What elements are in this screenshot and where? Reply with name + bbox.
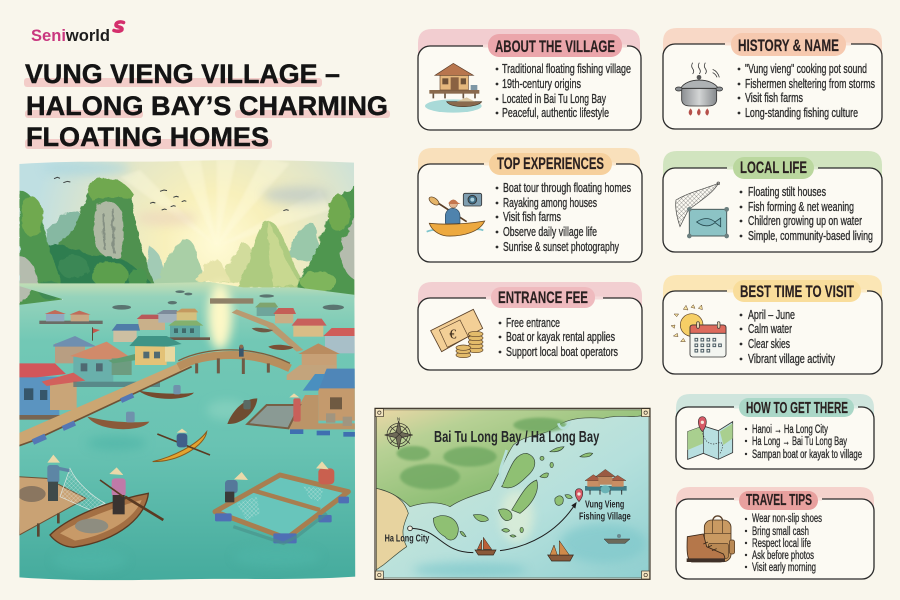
bullet list: Visit early morning (752, 562, 816, 574)
bullet list: Observe daily village life (503, 225, 597, 239)
junk boats (475, 537, 573, 561)
band (676, 487, 874, 512)
title (24, 59, 390, 152)
middle houses (92, 309, 210, 342)
bullet list: Respect local life (752, 538, 811, 550)
bullet list: Visit fish farms (503, 210, 561, 224)
sky (20, 160, 354, 288)
bullet list: Support local boat operators (506, 345, 618, 359)
icon: sun and calendar (671, 305, 726, 357)
bullet list: Clear skies (748, 337, 790, 351)
title: HALONG BAY’S CHARMING (26, 91, 388, 121)
mainland (376, 409, 649, 507)
main left karst (48, 176, 154, 284)
logo: Seniworld: Seniworld (31, 26, 110, 45)
illustration: floating village scene (10, 150, 363, 590)
bullet list: Visit fish farms (745, 91, 803, 105)
bullet list: Free entrance (506, 316, 560, 330)
bullet list: 19th-century origins (502, 77, 581, 91)
green forest (397, 418, 567, 489)
title highlights (24, 78, 390, 149)
right houses near (287, 343, 357, 437)
bullet list (738, 62, 875, 120)
bullet list (745, 424, 862, 461)
bullet list (496, 181, 631, 254)
yellow kayak and paddler (153, 429, 210, 462)
heading: ENTRANCE FEE (498, 288, 588, 307)
bullet list: Wear non-slip shoes (752, 513, 822, 525)
panel: top experiences (418, 148, 642, 262)
icon: ticket and coins: € (449, 327, 456, 342)
heading (491, 287, 595, 308)
water inlets (500, 422, 570, 485)
distant left houses (39, 310, 103, 324)
right floating cage (247, 393, 301, 428)
band (418, 282, 642, 312)
band (676, 394, 874, 420)
band (418, 148, 640, 178)
birds (54, 177, 289, 211)
heading (488, 34, 622, 57)
band (418, 29, 640, 60)
fish cage with workers (215, 461, 349, 543)
map (375, 408, 650, 579)
heading (739, 398, 854, 417)
map sea (376, 409, 649, 578)
icon: floating houses (585, 469, 627, 495)
map sea shading (413, 490, 647, 578)
bullet list: Sunrise & sunset photography (503, 240, 620, 254)
heading (733, 280, 861, 302)
icon: cooking pot (675, 63, 723, 116)
label: Ha Long City: Ha Long City (385, 534, 430, 545)
label: Vung Vieng Fishing Village (579, 499, 631, 522)
bullet list (740, 185, 873, 243)
left houses near (17, 336, 182, 420)
frame (375, 408, 650, 579)
panel: about the village (418, 29, 641, 130)
heading: HISTORY & NAME (738, 36, 839, 55)
icon: stilt house (425, 63, 482, 113)
title: VUNG VIENG VILLAGE – (25, 59, 340, 89)
bullet list: Hanoi → Ha Long City (752, 424, 828, 436)
pin: Vung Vieng (575, 489, 583, 502)
sampan (604, 534, 630, 543)
band (663, 151, 882, 182)
lower left coast (376, 488, 408, 570)
bullet list (745, 513, 822, 574)
panel: entrance fee (418, 282, 642, 370)
right edge karst (295, 186, 357, 297)
water (10, 282, 363, 590)
heading (739, 491, 818, 510)
icon: kayak and camera (427, 193, 485, 236)
far karst peaks (47, 211, 320, 287)
heading: LOCAL LIFE (740, 158, 807, 177)
title: FLOATING HOMES (26, 122, 269, 152)
bullet list: Fish forming & net weaning (748, 200, 854, 214)
panel: local life (663, 151, 882, 252)
icon: ticket and coins (431, 309, 483, 358)
label: Vung Vieng Fishing Village: Fishing Village (579, 511, 631, 522)
label: Vung Vieng Fishing Village: Vung Vieng (585, 499, 624, 510)
panel: best time to visit (663, 275, 882, 374)
sun rays (124, 160, 328, 236)
icon: backpack and boot (687, 516, 735, 562)
bullet list: Vibrant village activity (748, 352, 836, 366)
bullet list: Rayaking among houses (503, 196, 597, 210)
left edge karst (19, 190, 63, 307)
heading (489, 153, 612, 175)
bullet list: Ha Long → Bai Tu Long Bay (752, 436, 847, 448)
bullet list: Bring small cash (752, 526, 809, 538)
panel: history and name (663, 28, 882, 129)
bullet list: Boat or kayak rental applies (506, 330, 615, 344)
heading (731, 33, 846, 56)
band (663, 28, 882, 60)
bullet list: Floating stilt houses (748, 185, 826, 199)
wooden boat with fisher (50, 467, 163, 547)
clouds (43, 162, 330, 226)
bullet list: Ask before photos (752, 550, 814, 562)
N label: N (397, 416, 400, 421)
bullet list (499, 316, 618, 359)
bullet list (740, 308, 836, 366)
panel: how to get there (676, 394, 874, 469)
arched bridge (178, 345, 290, 374)
islands (433, 447, 593, 540)
compass (385, 421, 413, 449)
icon: net and fish (676, 182, 729, 238)
mid boats (87, 385, 257, 429)
bullet list: Traditional floating fishing village (502, 62, 631, 76)
water shading (89, 400, 242, 452)
heading: ABOUT THE VILLAGE (495, 37, 615, 56)
far right village (210, 298, 357, 353)
bullet list: Peaceful, authentic lifestyle (502, 106, 609, 120)
corners (375, 409, 650, 579)
distant boats (112, 290, 344, 310)
route (413, 506, 574, 553)
heading: TOP EXPERIENCES (497, 154, 604, 173)
heading (733, 157, 814, 179)
bullet list: Boat tour through floating homes (503, 181, 631, 195)
icon: folded map with pin (688, 417, 733, 459)
bullet list (496, 62, 631, 120)
heading: TRAVEL TIPS (746, 492, 812, 509)
panel: travel tips (676, 487, 874, 579)
bullet list: April – June (748, 308, 795, 322)
heading: HOW TO GET THERE (746, 400, 848, 417)
sun reflection (208, 283, 232, 350)
left pier with fisher and net (18, 455, 105, 537)
long walkway (18, 363, 192, 446)
bullet list: Calm water (748, 322, 792, 336)
map title: Bai Tu Long Bay / Ha Long Bay (434, 429, 599, 446)
band (663, 275, 882, 305)
bullet list: Located in Bai Tu Long Bay (502, 92, 607, 106)
